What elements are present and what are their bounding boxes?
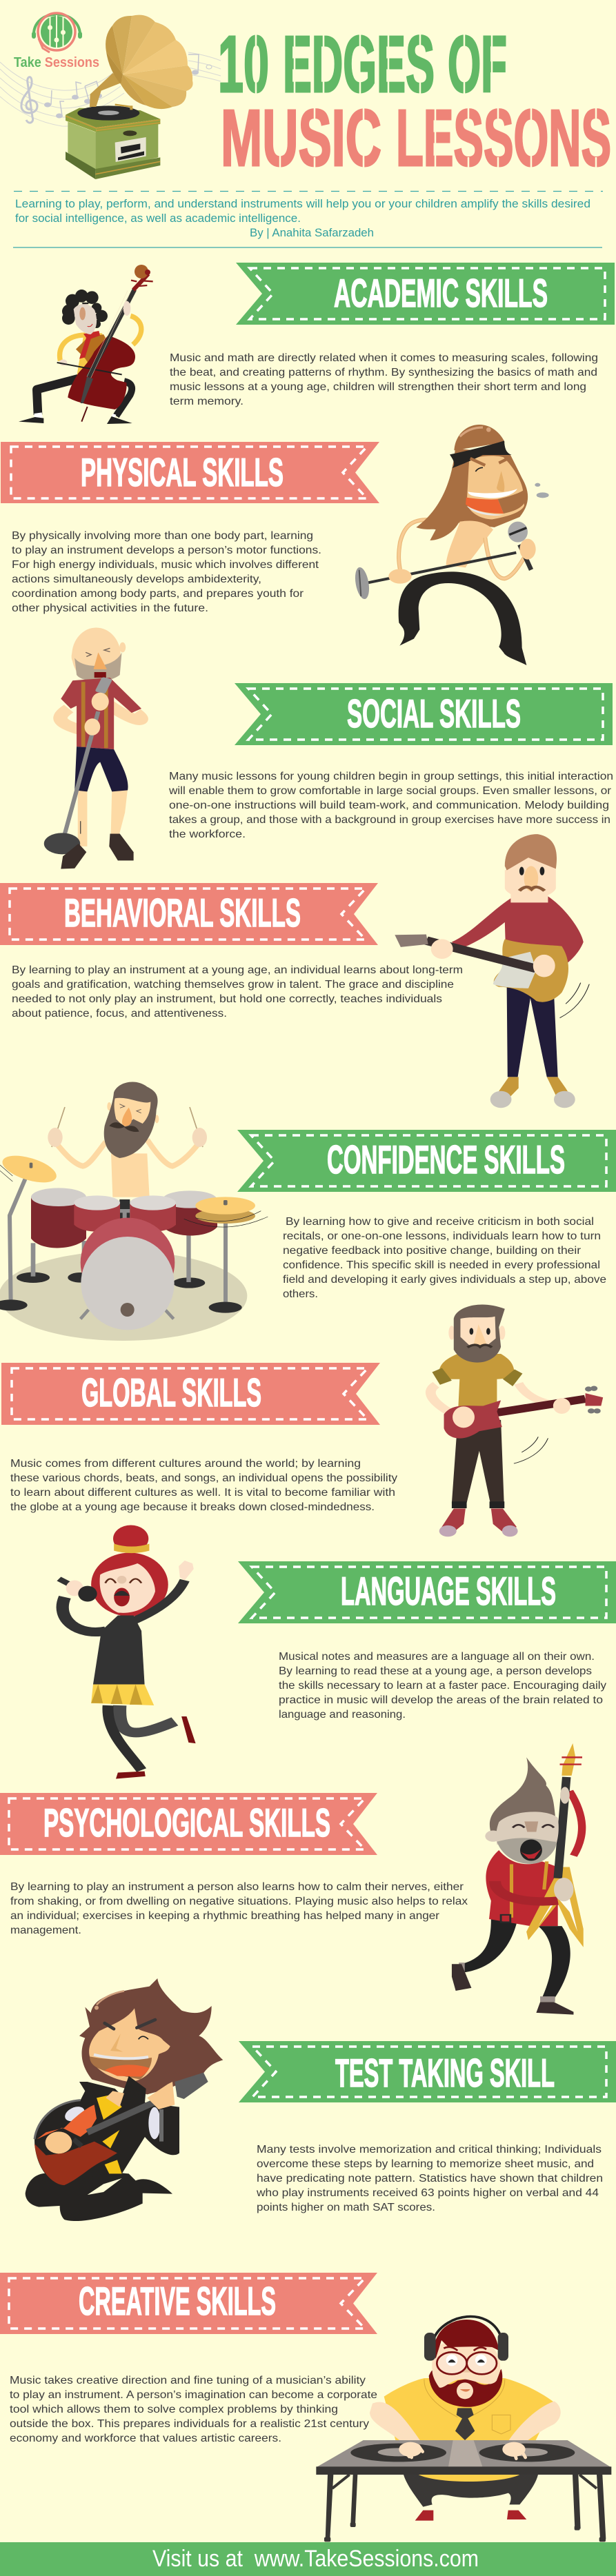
illustration: drummer <box>0 1082 268 1341</box>
text: physical skills: to play an instrument develops a person’s motor functions. <box>12 545 321 556</box>
text: behavioral skills: By learning to play an instrument at a young age, an individual learns about long-term <box>12 964 463 976</box>
text: global skills: the globe at a young age because it breaks down closed-mindedness. <box>10 1501 375 1513</box>
text: confidence skills: recitals, or one-on-one lessons, individuals learn how to turn <box>283 1230 601 1242</box>
text: test taking skill <box>256 2144 603 2213</box>
illustration: long-haired singer <box>353 425 549 665</box>
banner: test taking skill <box>239 2041 616 2102</box>
intro text: By | Anahita Safarzadeh <box>250 227 374 239</box>
text: behavioral skills <box>12 964 463 1020</box>
banner: physical skills <box>1 442 379 503</box>
text: behavioral skills: about patience, focus, and attentiveness. <box>12 1008 227 1020</box>
text: physical skills: For high energy individuals, music which involves different <box>12 559 319 571</box>
text: language skills <box>279 1651 606 1721</box>
text: test taking skill: who play instruments received 63 points higher on verbal and 44 <box>256 2187 599 2199</box>
intro text: for social intelligence, as well as academic intelligence. <box>15 212 301 225</box>
text: social skills: the workforce. <box>169 829 246 840</box>
banner: psychological skills: PSYCHOLOGICAL SKILLS <box>43 1801 330 1845</box>
illustration: bearded guitarist <box>430 1304 603 1537</box>
text: confidence skills: field and developing it early gives individuals a step up, above <box>283 1274 606 1286</box>
text: confidence skills: negative feedback into positive change, building on their <box>283 1245 582 1257</box>
text: creative skills: tool which allows them to solve complex problems by thinking <box>10 2404 338 2415</box>
banner: confidence skills <box>237 1130 616 1192</box>
text: social skills: one-on-one instructions will build team-work, and communication. Melody building <box>169 800 609 811</box>
illustration: cellist <box>19 265 153 424</box>
banner: psychological skills <box>0 1793 377 1855</box>
text: social skills: will enable them to grow comfortable in large social groups. Even smaller lessons, or <box>168 785 612 797</box>
text: psychological skills: By learning to play an instrument a person also learns how to calm their nerves, either <box>10 1881 464 1893</box>
text: language skills: By learning to read these at a young age, a person develops <box>279 1665 592 1677</box>
text: global skills: these various chords, beats, and songs, an individual opens the possibility <box>10 1472 397 1484</box>
text: physical skills: actions simultaneously develops ambidexterity, <box>12 574 261 585</box>
text: physical skills: By physically involving more than one body part, learning <box>12 530 313 542</box>
logo: Take Sessions: Take Sessions <box>14 55 99 70</box>
illustration: bald singer with mic stand <box>44 627 141 869</box>
text: language skills: the skills necessary to learn at a faster pace. Encouraging daily <box>279 1680 606 1692</box>
text: physical skills <box>12 530 321 614</box>
icon: gramophone <box>66 15 193 179</box>
text: global skills: Music comes from different cultures around the world; by learning <box>10 1458 361 1470</box>
text: language skills: language and reasoning. <box>279 1709 406 1721</box>
text: physical skills: coordination among body parts, and prepares youth for <box>12 588 304 600</box>
banner: academic skills <box>236 263 615 325</box>
footer: Visit us at www.TakeSessions.com <box>152 2546 479 2572</box>
title: EDGES <box>283 19 435 109</box>
banner: creative skills: CREATIVE SKILLS <box>79 2280 276 2324</box>
logo: Take Sessions <box>14 13 99 70</box>
banner: creative skills <box>0 2273 377 2334</box>
text: social skills: takes a group, and those with a background in group exercises have more success in <box>169 814 610 826</box>
text: creative skills: outside the box. This prepares individuals for a realistic 21st century <box>10 2418 369 2430</box>
text: behavioral skills: needed to not only play an instrument, but hold one correctly, teaches individuals <box>12 993 442 1005</box>
text: language skills: practice in music will develop the areas of the brain related to <box>279 1694 603 1706</box>
illustration: DJ <box>316 2317 611 2542</box>
text: academic skills <box>170 352 598 407</box>
banner: physical skills: PHYSICAL SKILLS <box>81 451 284 495</box>
text: psychological skills: from shaking, or from dwelling on negative situations. Playing music also helps to relax <box>10 1896 468 1907</box>
text: test taking skill: have predicating note pattern. Statistics have shown that children <box>257 2173 603 2184</box>
title: MUSIC <box>221 93 381 183</box>
illustration: rock guitarist <box>26 1978 223 2221</box>
icon: musical staff and notes <box>0 52 221 126</box>
text: test taking skill: points higher on math SAT scores. <box>257 2202 435 2213</box>
text: creative skills: to play an instrument. A person’s imagination can become a corporate <box>10 2389 377 2401</box>
text: confidence skills: By learning how to give and receive criticism in both social <box>286 1216 594 1228</box>
text: social skills <box>168 771 613 840</box>
banner: language skills <box>238 1561 616 1623</box>
text: creative skills: economy and workforce that values artistic careers. <box>10 2433 281 2444</box>
text: confidence skills <box>283 1216 606 1300</box>
text: creative skills: Music takes creative direction and fine tuning of a musician’s ability <box>10 2375 366 2386</box>
text: academic skills: term memory. <box>170 396 244 407</box>
text: test taking skill: Many tests involve memorization and critical thinking; Individuals <box>257 2144 602 2156</box>
text: confidence skills: confidence. This specific skill is needed in every professional <box>283 1259 600 1271</box>
illustration: bass player <box>452 1743 584 2015</box>
banner: global skills <box>1 1363 380 1425</box>
title: 10 <box>218 19 269 109</box>
text: creative skills <box>10 2375 377 2444</box>
text: psychological skills: management. <box>10 1925 81 1936</box>
text: academic skills: Music and math are directly related when it comes to measuring scales, following <box>170 352 598 364</box>
text: confidence skills: others. <box>283 1288 318 1300</box>
text: physical skills: other physical activities in the future. <box>12 602 208 614</box>
title: OF <box>448 19 507 109</box>
banner: behavioral skills <box>0 883 378 945</box>
text: academic skills: music lessons at a young age, children will strengthen their short term and long <box>170 381 586 393</box>
text: social skills: Many music lessons for young children begin in group settings, this initial interaction <box>169 771 613 782</box>
intro text <box>13 192 603 247</box>
text: language skills: Musical notes and measures are a language all on their own. <box>279 1651 595 1663</box>
text: psychological skills <box>10 1881 468 1936</box>
text: academic skills: the beat, and creating patterns of rhythm. By synthesizing the basics of math and <box>170 367 597 378</box>
intro text: Learning to play, perform, and understand instruments will help you or your children amplify the skills desired <box>15 198 590 210</box>
banner: behavioral skills: BEHAVIORAL SKILLS <box>64 891 301 935</box>
text: behavioral skills: goals and gratification, watching themselves grow in talent. The grace and discipline <box>12 979 454 991</box>
illustration: red-haired singer <box>59 1525 196 1779</box>
text: global skills: to learn about different cultures as well. It is vital to become familiar with <box>10 1487 395 1499</box>
text: global skills <box>10 1458 397 1513</box>
illustration: guitarist with moustache <box>395 834 589 1108</box>
text: psychological skills: an individual; exercises in keeping a rhythmic breathing has helped many in anger <box>10 1910 440 1922</box>
text: test taking skill: overcome these steps by learning to memorize sheet music, and <box>257 2158 594 2170</box>
banner: social skills <box>235 683 613 745</box>
title <box>218 19 611 183</box>
footer <box>0 2542 616 2576</box>
banner: global skills: GLOBAL SKILLS <box>81 1371 261 1415</box>
